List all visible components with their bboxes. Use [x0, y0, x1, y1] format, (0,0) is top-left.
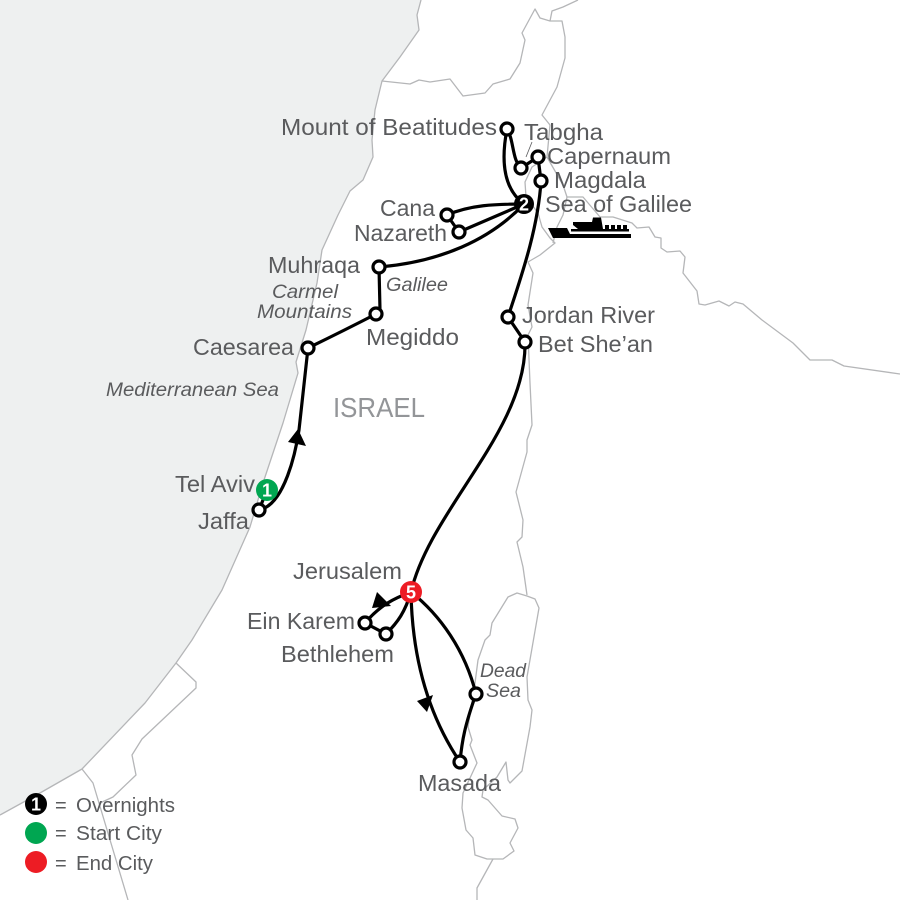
city labels: Mount of Beatitudes: [281, 114, 497, 140]
city labels: Jerusalem: [293, 558, 402, 584]
sea: Mediterranean: [0, 0, 421, 815]
city labels: Ein Karem: [247, 608, 355, 634]
arrow: toward Masada: [417, 695, 433, 712]
city labels: [175, 114, 692, 796]
badge: Tel Aviv start, 1 overnight: [256, 479, 278, 501]
badge: Galilee, 2 overnights: 2: [519, 194, 529, 214]
icon: ship: [548, 218, 631, 238]
region labels: Mediterranean Sea: [106, 380, 279, 401]
region labels: Sea: [486, 681, 521, 702]
legend: =: [55, 823, 67, 845]
city labels: Jordan River: [522, 302, 655, 328]
stop markers: [253, 123, 547, 768]
region labels: [106, 275, 527, 702]
route lines: [259, 129, 541, 762]
arrow: north to Caesarea: [288, 429, 306, 446]
legend: 1: [31, 794, 41, 814]
legend: =: [55, 853, 67, 875]
region labels: Galilee: [386, 275, 448, 296]
Tabgha leader line: [526, 142, 532, 157]
city labels: Caesarea: [193, 334, 294, 360]
legend: End City: [76, 853, 153, 875]
region labels: Carmel: [272, 282, 339, 303]
badge: Jerusalem end, 5 overnights: 5: [406, 582, 416, 602]
city labels: Muhraqa: [268, 252, 360, 278]
legend: [25, 793, 175, 875]
city labels: Bethlehem: [281, 641, 394, 667]
legend: =: [55, 795, 67, 817]
city labels: Jaffa: [198, 508, 249, 534]
city labels: Masada: [418, 770, 501, 796]
city labels: Sea of Galilee: [545, 191, 692, 217]
legend: Overnights: [76, 795, 175, 817]
arrow: toward Ein Karem: [372, 592, 391, 608]
badge: Jerusalem end, 5 overnights: [400, 581, 422, 603]
city labels: Tel Aviv: [175, 471, 256, 497]
legend: Start City: [76, 823, 162, 845]
city labels: Tabgha: [524, 119, 603, 145]
region labels: Dead: [480, 661, 527, 682]
city labels: Megiddo: [366, 324, 459, 350]
city labels: Nazareth: [354, 220, 447, 246]
badge: Galilee, 2 overnights: [514, 194, 534, 214]
city labels: Cana: [380, 195, 435, 221]
country label: Israel: ISRAEL: [333, 392, 425, 423]
city labels: Bet She’an: [538, 331, 653, 357]
badge: Tel Aviv start, 1 overnight: 1: [262, 480, 272, 500]
city labels: Capernaum: [547, 143, 671, 169]
city labels: Magdala: [554, 167, 646, 193]
region labels: Mountains: [257, 302, 353, 323]
